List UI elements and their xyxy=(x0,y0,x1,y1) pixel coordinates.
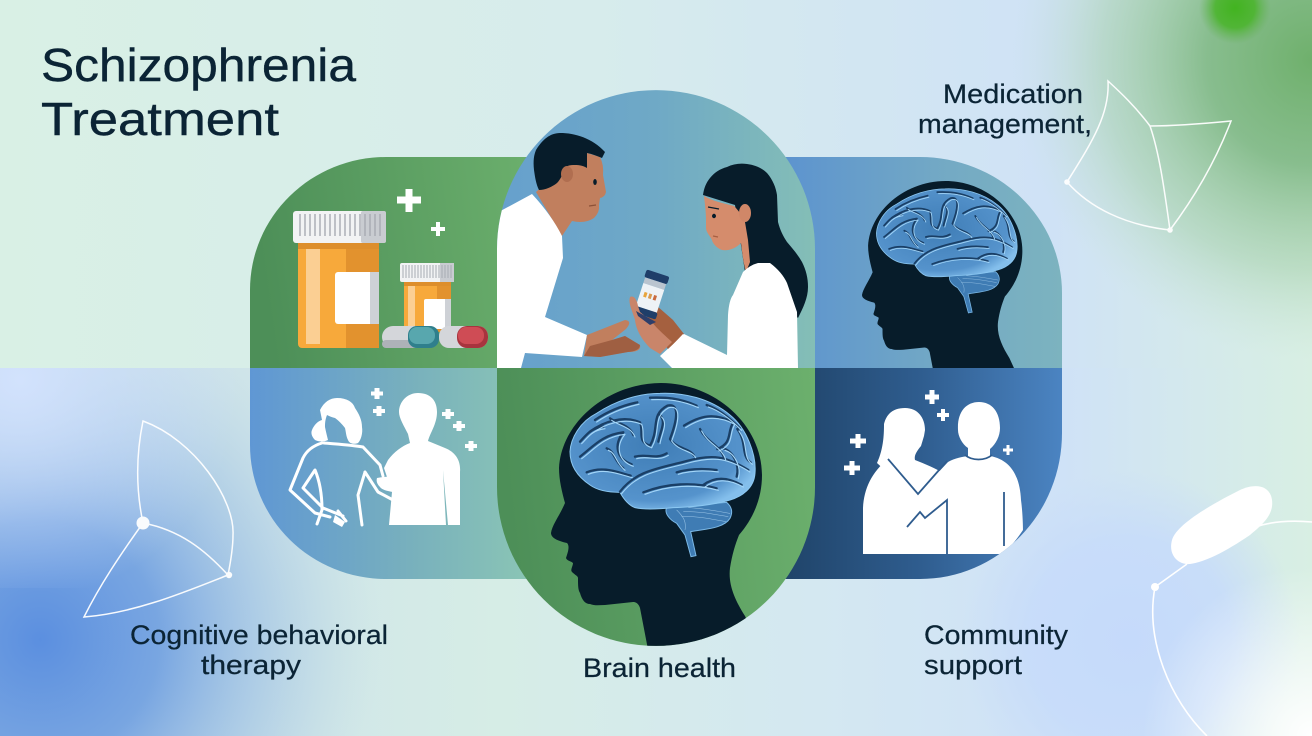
label: community support xyxy=(924,620,1069,680)
icon: cognitive therapy figures xyxy=(290,388,477,527)
icon: doctor xyxy=(495,133,640,368)
label: medication management: management, xyxy=(918,109,1092,139)
icon: small pill bottle xyxy=(400,263,454,332)
panel: medication consultation xyxy=(495,90,815,368)
icon: plus signs xyxy=(397,189,445,236)
label: cognitive behavioral therapy xyxy=(130,620,388,680)
decorative pill and arc: bottom right xyxy=(1151,486,1312,736)
panel: community therapy xyxy=(250,368,540,579)
label: brain health: Brain health xyxy=(583,653,736,683)
icon: capsules xyxy=(382,326,488,348)
label: cognitive behavioral therapy: therapy xyxy=(201,650,302,680)
title: Treatment xyxy=(41,93,279,145)
panel: brain profile top right xyxy=(786,157,1062,368)
label: community support: support xyxy=(924,650,1023,680)
title: Schizophrenia xyxy=(41,39,356,91)
label: medication management xyxy=(918,79,1092,139)
decorative line shape: bottom left xyxy=(84,421,233,617)
label: cognitive behavioral therapy: Cognitive behavioral xyxy=(130,620,388,650)
panel: medication bottles xyxy=(250,157,540,368)
icon: two supportive figures xyxy=(844,390,1023,554)
icon: head silhouette with brain xyxy=(862,181,1022,368)
panel: brain health xyxy=(497,368,815,660)
icon: patient xyxy=(660,164,808,368)
icon: large head silhouette with brain xyxy=(551,383,765,660)
title xyxy=(41,39,356,145)
decorative line shape: top right xyxy=(1064,81,1231,233)
icon: large pill bottle xyxy=(293,211,386,348)
label: community support: Community xyxy=(924,620,1069,650)
panel: community support xyxy=(780,368,1062,579)
label: medication management: Medication xyxy=(943,79,1083,109)
icon: hands holding bottle xyxy=(630,270,684,354)
